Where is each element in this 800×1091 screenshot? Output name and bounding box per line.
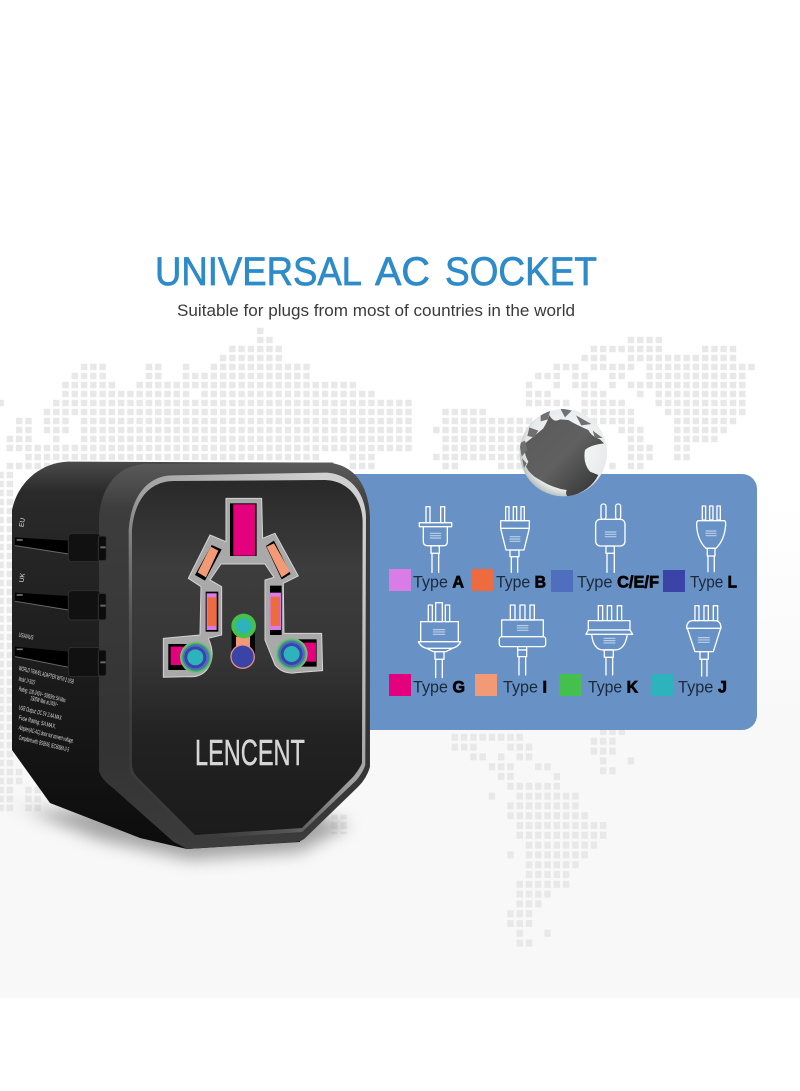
world map dots: northern hemisphere xyxy=(0,326,756,812)
world map dots: south america xyxy=(330,732,608,948)
subtitle: Suitable for plugs from most of countries in the world xyxy=(177,301,575,320)
side labels: Fuse Rating: 5A MAX. xyxy=(18,714,57,731)
legend: type B: Type B xyxy=(496,572,546,592)
side labels: Rating: 100-240V~ 50/60Hz 5A Max xyxy=(18,686,67,704)
side labels xyxy=(18,517,75,754)
adapter bezel xyxy=(99,463,370,849)
plug icon: type I xyxy=(499,605,546,675)
side slots and switches xyxy=(15,533,106,677)
adapter front face xyxy=(132,480,363,835)
socket: type G top slot xyxy=(230,503,257,556)
background gradient band xyxy=(0,500,800,998)
plug icon: type L xyxy=(697,506,726,572)
legend: type K xyxy=(559,674,639,696)
socket: type I right slot xyxy=(266,541,291,579)
legend: type I xyxy=(475,674,547,696)
legend: type J xyxy=(651,674,727,696)
legend: type K: Type K xyxy=(588,678,639,696)
title: SOCKET xyxy=(445,250,597,294)
adapter xyxy=(12,462,370,849)
plug icon: type G xyxy=(418,603,461,678)
legend: type L: Type L xyxy=(690,572,737,592)
legend: type G xyxy=(389,674,465,696)
plug icon: type A xyxy=(419,507,452,572)
legend: type C/E/F: Type C/E/F xyxy=(577,572,659,592)
side labels: USA/AUS xyxy=(18,632,34,642)
world map dots: southern africa xyxy=(589,727,636,776)
socket: type I left slot xyxy=(195,545,222,581)
legend: type B xyxy=(471,569,546,592)
plug icon: type K xyxy=(586,606,633,675)
legend: type J: Type J xyxy=(678,678,727,696)
socket: centre earth pin xyxy=(230,614,256,669)
legend: type A: Type A xyxy=(413,572,464,592)
legend: type A xyxy=(389,569,464,592)
adapter silver ring xyxy=(129,473,366,839)
side labels: Model: JY-302S xyxy=(18,676,36,687)
side labels: EU xyxy=(18,517,27,528)
socket: right round pin xyxy=(276,638,317,670)
title xyxy=(155,250,597,294)
legend: type I: Type I xyxy=(503,678,547,696)
side labels: Compliant with: BS8546, IEC60884-2-5 xyxy=(18,734,70,754)
side labels: UK xyxy=(18,572,27,583)
socket: left round pin xyxy=(168,641,212,673)
socket: type A B right slot xyxy=(270,586,282,635)
universal socket xyxy=(163,498,323,677)
adapter: Adapter(AC-AC) does not convert voltage. xyxy=(18,724,75,745)
logo: LENCENT: LENCENT xyxy=(195,732,305,773)
plug icon: type B xyxy=(501,507,529,572)
adapter drop shadow xyxy=(0,800,350,860)
plug icon: type C/E/F xyxy=(596,504,625,572)
socket: type A B left slot xyxy=(206,592,218,632)
icon: globe xyxy=(519,408,607,497)
title: UNIVERSAL xyxy=(155,250,362,294)
side labels: USB Output: DC 5V 2.4A MAX. xyxy=(18,704,63,722)
adapter body side xyxy=(12,462,333,849)
legend: type G: Type G xyxy=(413,678,465,696)
plug icon: type J xyxy=(687,606,721,676)
adapter: WORLD TRAVEL ADAPTER WITH 2 USB xyxy=(18,665,75,686)
side labels: 1500W Max at 240V~ xyxy=(30,695,59,709)
panel: plug types xyxy=(340,474,757,730)
legend: type L xyxy=(663,570,737,592)
title: AC xyxy=(375,250,430,294)
legend: type C/E/F xyxy=(551,570,659,592)
socket silver frame xyxy=(163,498,323,677)
